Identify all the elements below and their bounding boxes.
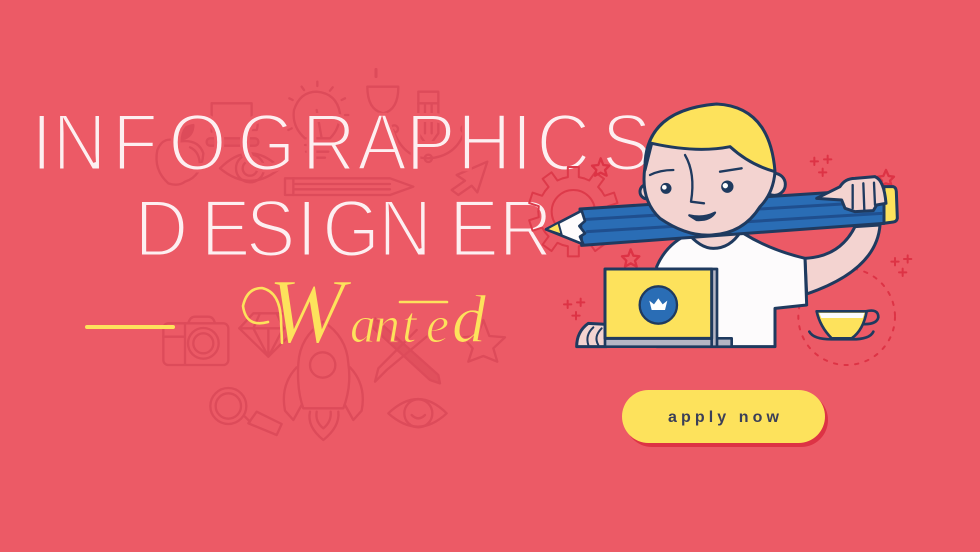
title: [31, 98, 652, 274]
cup highlight: [819, 313, 864, 318]
cup body: [817, 311, 867, 338]
title line: INFOGRAPHICS: INFOGRAPHICS: [31, 98, 652, 188]
icon: goblet: [367, 69, 398, 113]
icon: crossed pen and pencil: [370, 318, 440, 383]
background icons: lower group: [163, 313, 505, 440]
icon: eye: [220, 153, 280, 182]
head: [644, 140, 775, 235]
pencil body: [580, 189, 884, 245]
mouth: [689, 213, 715, 220]
hand on pencil: [817, 177, 886, 212]
icon: star: [463, 320, 505, 362]
pencil wood tip: [546, 211, 585, 244]
nose: [685, 155, 704, 203]
icon: crown: [649, 298, 667, 310]
button label: apply now: [668, 409, 780, 426]
icon: apple: [156, 125, 203, 185]
letters: Wanted: e: [426, 297, 449, 354]
button: apply now: [622, 390, 828, 447]
icon: magnifier with tag: [210, 388, 282, 435]
eyes: [662, 182, 732, 193]
pencil stripes: [587, 202, 882, 232]
icon: diamond: [239, 313, 297, 357]
laptop lid: [605, 269, 712, 338]
laptop side edge: [712, 269, 717, 347]
laptop base: [605, 338, 732, 347]
icon: light bulb: [288, 82, 348, 158]
pencil lead: [546, 223, 562, 235]
icon: camera: [163, 317, 228, 365]
brows: [650, 168, 742, 175]
left hand: [577, 323, 607, 347]
pencil: [546, 187, 897, 245]
letters: Wanted: a: [350, 297, 376, 354]
character illustration: [528, 104, 911, 365]
laptop: [605, 269, 732, 347]
right ear: [763, 173, 785, 195]
shirt: [657, 233, 807, 347]
arm: [805, 225, 880, 294]
face: [650, 155, 742, 220]
icon: vertical pencil: [418, 92, 438, 147]
icon: dashed circle: [798, 268, 895, 365]
icon: horizontal pencil: [285, 178, 413, 195]
teacup: [809, 311, 878, 339]
icon: ruler bar: [207, 138, 258, 146]
pencil eraser: [883, 187, 897, 223]
neck: [687, 232, 741, 248]
cup handle: [862, 311, 878, 324]
icon: sparkles: [564, 156, 911, 319]
button face: [622, 390, 825, 443]
flourish and crossbar: [243, 288, 447, 343]
wanted script heading: [243, 260, 487, 362]
letters: Wanted: d: [452, 281, 487, 357]
saucer: [809, 332, 873, 339]
left ear: [640, 184, 655, 199]
letters: Wanted: n: [374, 297, 400, 354]
button shadow: [625, 393, 828, 447]
icon: cursor arrow: [452, 162, 487, 195]
icon: vector curve: [391, 125, 469, 162]
icon: gear: [528, 167, 619, 256]
laptop badge: [640, 286, 677, 324]
icon: red stars: [592, 158, 894, 267]
letters: Wanted: W: [268, 260, 352, 362]
letters: Wanted: t: [402, 297, 418, 354]
icon: rocket: [284, 322, 363, 440]
icon: eye: [388, 399, 447, 427]
icon: cup: [212, 103, 258, 132]
background icons: upper group: [156, 69, 487, 195]
title line: DESIGNER: DESIGNER: [134, 184, 553, 274]
yellow rule: [85, 325, 175, 329]
hair: [645, 104, 775, 172]
